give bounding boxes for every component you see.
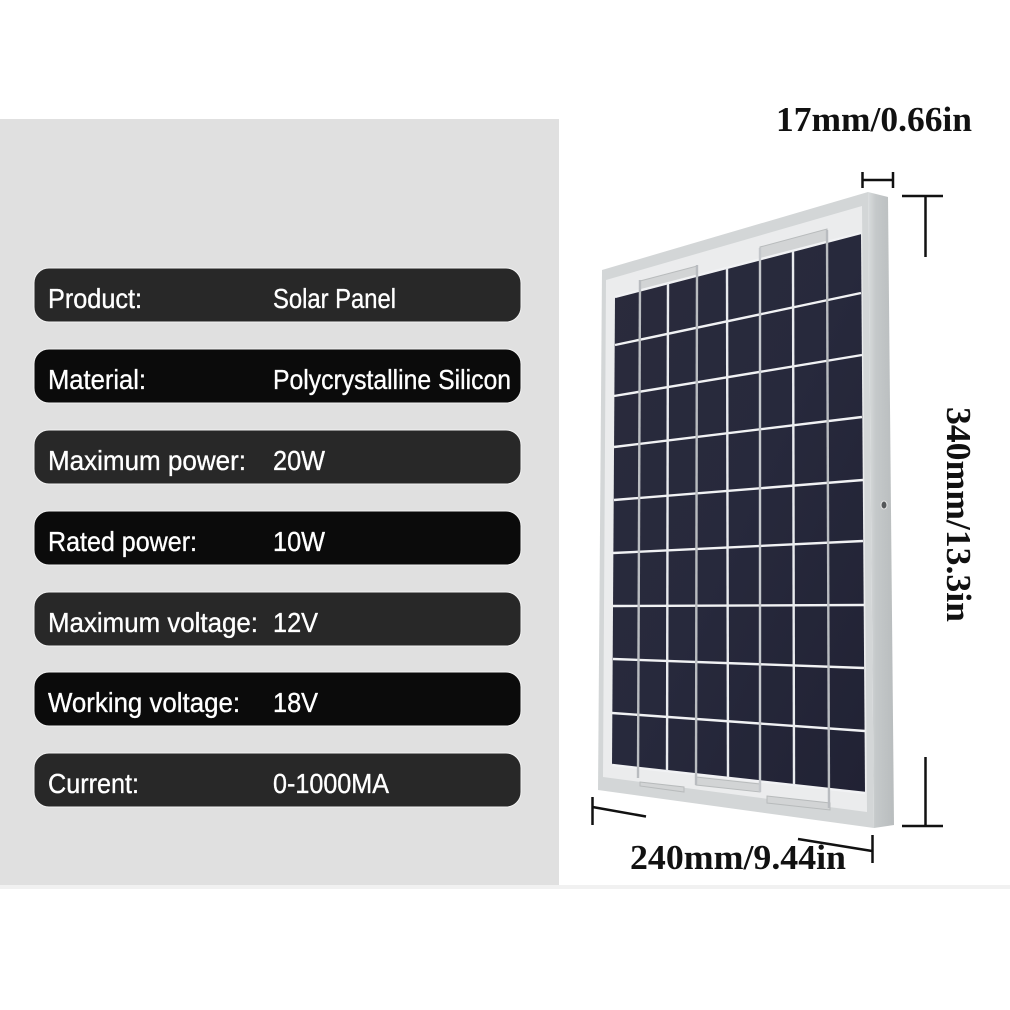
spec row: current (34, 753, 521, 807)
dimension: height top marker (902, 196, 943, 257)
spec row: material (34, 349, 521, 403)
spec row: working voltage: Working voltage: (48, 687, 240, 718)
solar panel illustration (598, 192, 894, 828)
panel front frame (598, 192, 874, 828)
spec row: material: Polycrystalline Silicon (273, 364, 511, 395)
spec row: product: Product: (48, 283, 142, 314)
dimension: width label: 240mm/9.44in (630, 838, 846, 877)
spec row: maximum power (34, 430, 521, 484)
panel glass margin (603, 206, 867, 812)
spec row: maximum voltage: 12V (273, 607, 318, 638)
spec row: maximum voltage: Maximum voltage: (48, 607, 258, 638)
panel: specifications background (0, 119, 559, 885)
horizontal grid lines (612, 233, 865, 793)
spec row: product: Solar Panel (273, 283, 396, 314)
spec row: rated power (34, 511, 521, 565)
spec row: working voltage (34, 672, 521, 726)
spec row: rated power: 10W (273, 526, 326, 557)
dimension: thickness bracket (862, 172, 893, 188)
dimension: width right marker (798, 835, 872, 863)
spec row: rated power: Rated power: (48, 526, 197, 557)
spec row: material: Material: (48, 364, 146, 395)
dimension: height bottom marker (902, 757, 943, 826)
dimension: width left marker (592, 797, 646, 825)
dimension: height label: 340mm/13.3in (939, 407, 978, 622)
spec row: maximum voltage (34, 592, 521, 646)
panel mounting hole (881, 501, 887, 509)
bottom divider band (0, 885, 1010, 889)
spec row: maximum power: Maximum power: (48, 445, 246, 476)
solar cell array (612, 229, 865, 810)
bus bar clips (640, 229, 830, 810)
spec row: maximum power: 20W (273, 445, 326, 476)
dimension: thickness label: 17mm/0.66in (776, 100, 972, 139)
spec row: current: Current: (48, 768, 139, 799)
vertical grid lines (638, 230, 829, 808)
spec row: working voltage: 18V (273, 687, 318, 718)
spec row: product (34, 268, 521, 322)
panel side frame (868, 192, 894, 828)
spec row: current: 0-1000MA (273, 768, 389, 799)
